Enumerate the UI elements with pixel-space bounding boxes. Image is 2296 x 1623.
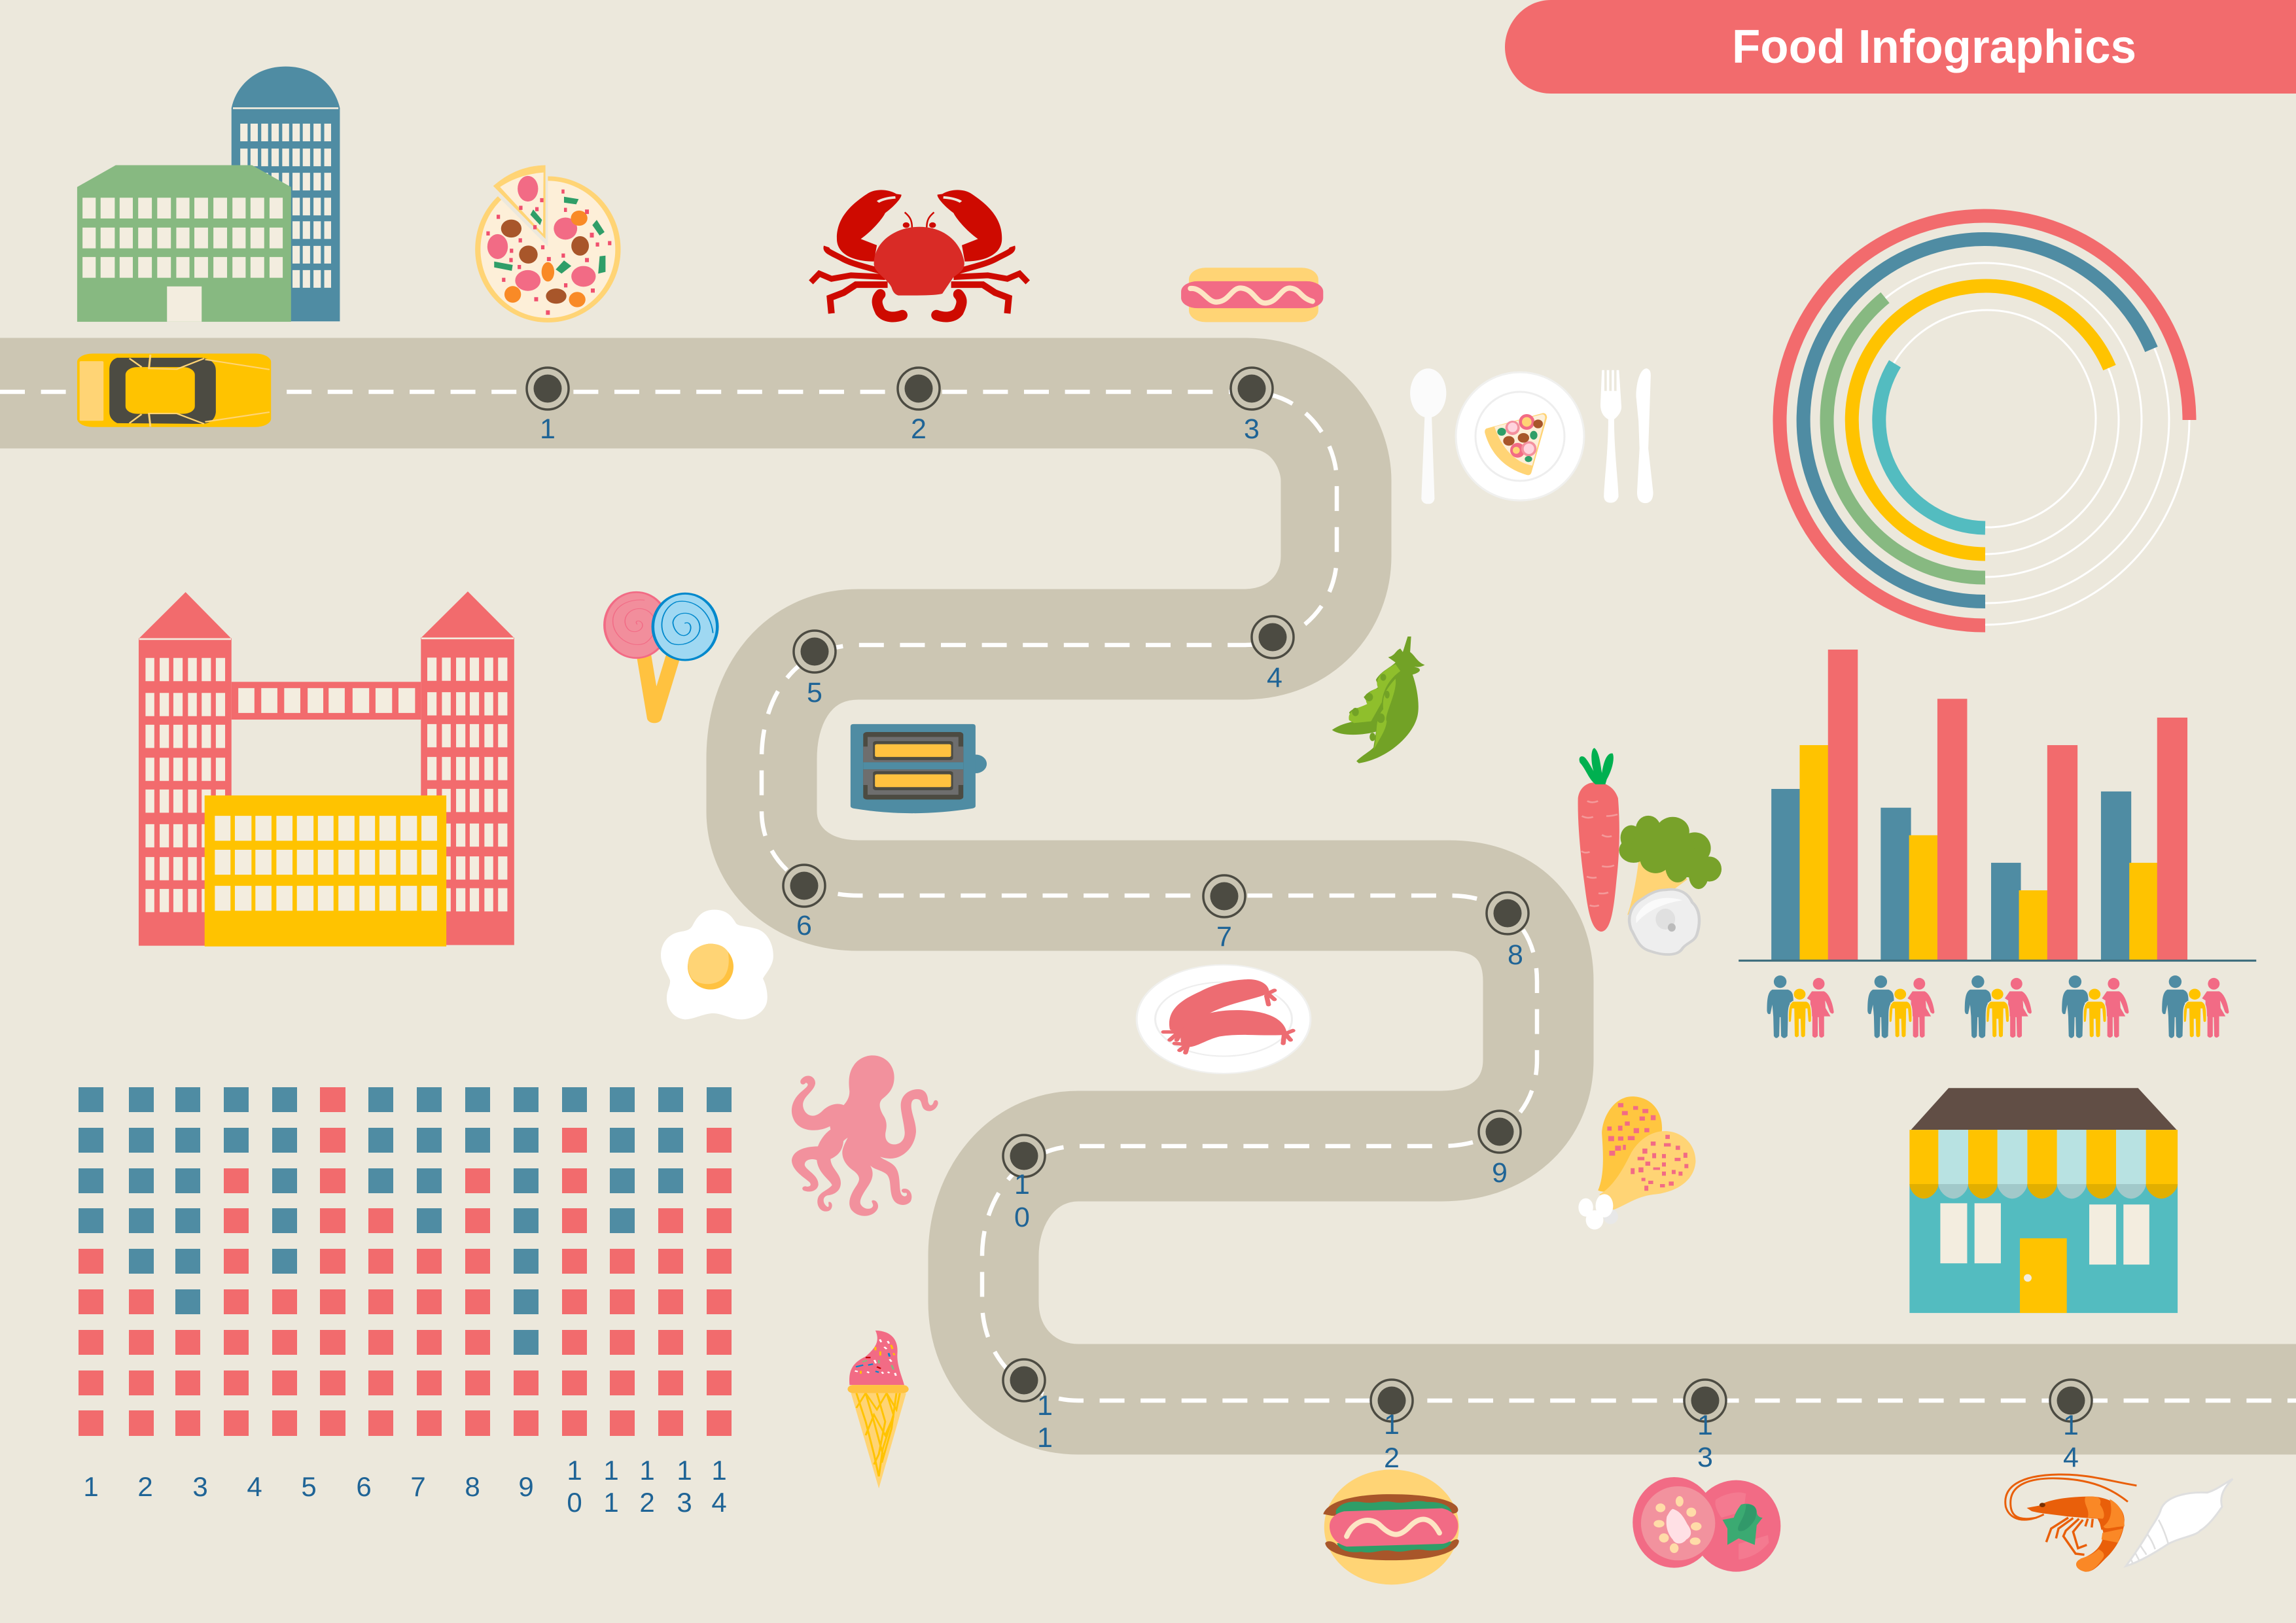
winding road xyxy=(0,392,2296,1401)
road stop numbers: 1 xyxy=(2063,1410,2079,1441)
road stop numbers: 1 xyxy=(1014,1169,1030,1200)
marker 14 xyxy=(2050,1380,2092,1422)
road stop numbers: 2 xyxy=(911,413,927,445)
icon: shrimp xyxy=(2005,1475,2136,1572)
icon: pea pod xyxy=(1332,637,1425,763)
icon: sausages on a plate xyxy=(1137,965,1311,1073)
road stop numbers: 2 xyxy=(1384,1442,1400,1474)
grid axis numbers: 1 xyxy=(711,1455,727,1486)
icon: crab xyxy=(811,190,1028,317)
grid axis numbers: 2 xyxy=(137,1471,153,1502)
marker 3 xyxy=(1231,368,1273,410)
road stop numbers: 1 xyxy=(1384,1409,1400,1440)
icon: oyster xyxy=(1629,890,1699,954)
road stop numbers: 7 xyxy=(1216,921,1232,952)
icon: green building xyxy=(77,166,291,322)
icon: broccoli xyxy=(1619,816,1722,915)
icon: shop xyxy=(1909,1088,2178,1313)
icon: sea shell xyxy=(2126,1479,2233,1566)
grid axis numbers: 1 xyxy=(83,1471,99,1502)
road stop numbers xyxy=(540,413,2079,1474)
bar chart xyxy=(1739,650,2256,962)
grid axis numbers: 4 xyxy=(247,1471,262,1502)
grid axis numbers: 8 xyxy=(465,1471,480,1502)
marker 1 xyxy=(527,368,569,410)
waffle grid chart xyxy=(79,1087,732,1518)
marker 2 xyxy=(898,368,940,410)
marker 6 xyxy=(783,865,825,907)
icon: octopus xyxy=(792,1055,938,1216)
grid axis numbers: 1 xyxy=(639,1455,655,1486)
road stop numbers: 1 xyxy=(1037,1390,1053,1422)
road stop numbers: 3 xyxy=(1697,1442,1713,1473)
road stop numbers: 1 xyxy=(540,413,556,445)
grid axis numbers: 1 xyxy=(677,1455,692,1486)
marker 13 xyxy=(1684,1380,1726,1422)
icon: yellow car xyxy=(77,354,271,427)
icon: lollipops xyxy=(605,592,717,718)
people icons row xyxy=(1767,975,2229,1038)
grid axis numbers: 9 xyxy=(518,1471,534,1502)
radial chart xyxy=(1780,215,2189,625)
grid axis numbers: 2 xyxy=(639,1487,655,1518)
marker 7 xyxy=(1203,875,1245,917)
road stop numbers: 1 xyxy=(1037,1422,1053,1454)
grid axis numbers: 1 xyxy=(603,1487,619,1518)
grid axis numbers: 7 xyxy=(410,1471,426,1502)
grid axis numbers: 5 xyxy=(301,1471,317,1502)
icon: red twin tower building xyxy=(139,591,514,947)
road stop numbers: 9 xyxy=(1492,1157,1508,1189)
icon: chicken legs xyxy=(1578,1096,1696,1230)
grid axis numbers: 1 xyxy=(567,1455,582,1486)
marker 5 xyxy=(794,631,836,672)
icon: ice cream cone xyxy=(847,1331,909,1488)
road stop numbers: 3 xyxy=(1244,413,1260,445)
road stop numbers: 4 xyxy=(1267,662,1282,693)
road stop numbers: 6 xyxy=(796,910,812,941)
icon: burger xyxy=(1323,1469,1459,1584)
grid axis numbers: 4 xyxy=(711,1487,727,1518)
grid axis numbers: 0 xyxy=(567,1487,582,1518)
grid axis numbers: 3 xyxy=(677,1487,692,1518)
grid axis numbers xyxy=(83,1455,727,1518)
road stop numbers: 8 xyxy=(1508,939,1523,971)
title banner: Food Infographics xyxy=(1732,21,2136,73)
icon: place setting xyxy=(1410,368,1653,504)
marker 12 xyxy=(1371,1380,1413,1422)
marker 8 xyxy=(1487,892,1528,934)
icon: toaster xyxy=(851,724,987,813)
road stop numbers: 4 xyxy=(2063,1442,2079,1473)
title banner xyxy=(1505,0,2296,94)
icon: hot dog xyxy=(1181,268,1323,322)
marker 4 xyxy=(1252,616,1294,658)
icon: carrot xyxy=(1578,748,1619,932)
marker 11 xyxy=(1003,1359,1045,1401)
grid axis numbers: 1 xyxy=(603,1455,619,1486)
icon: pizza xyxy=(468,166,621,323)
road stop numbers: 1 xyxy=(1697,1410,1713,1441)
icon: tomato xyxy=(1633,1477,1780,1572)
icon: fried egg xyxy=(661,910,773,1019)
marker 9 xyxy=(1479,1111,1521,1153)
icon: blue tower xyxy=(232,67,340,321)
road stop numbers: 0 xyxy=(1014,1202,1030,1233)
grid axis numbers: 6 xyxy=(356,1471,372,1502)
road stop numbers: 5 xyxy=(807,677,822,708)
grid axis numbers: 3 xyxy=(192,1471,208,1502)
marker 10 xyxy=(1003,1135,1045,1177)
